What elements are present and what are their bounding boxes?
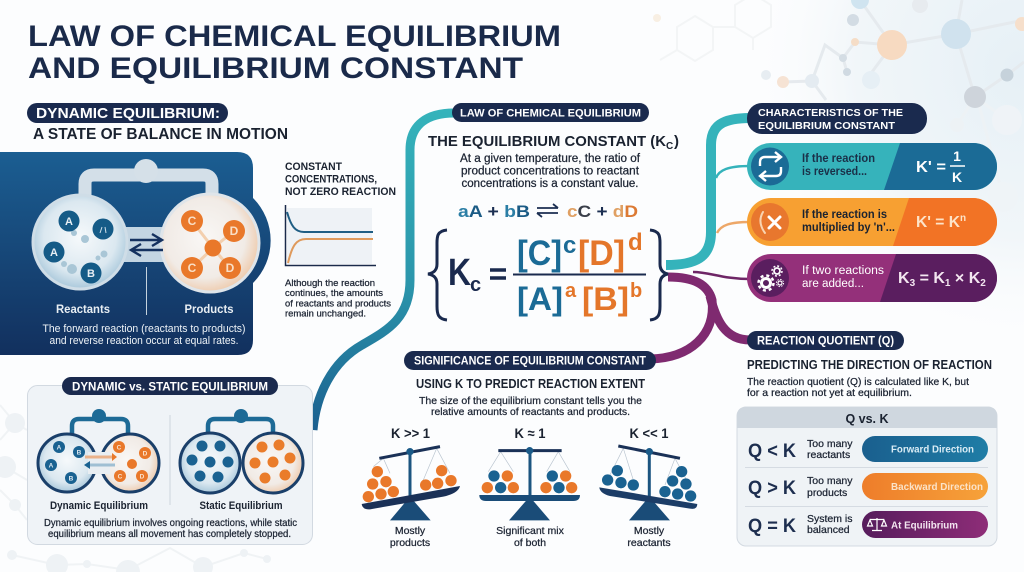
description: and reverse reaction occur at equal rates. — [50, 335, 238, 347]
dynamic equilibrium diagram: B — [69, 476, 74, 482]
row: reversed — [747, 143, 1000, 190]
panel: constant concentrations — [285, 161, 396, 320]
scale column: K >> 1: Mostly — [395, 525, 426, 537]
product flask: D — [230, 224, 239, 238]
icon: balanced scale — [479, 447, 580, 520]
reaction equation: aA + bB — [458, 202, 530, 221]
divider — [169, 415, 171, 505]
icon: scale tilted toward products — [362, 447, 460, 520]
row: multiplied: multiplied by 'n'... — [802, 222, 895, 234]
heading pill: SIGNIFICANCE OF EQUILIBRIUM CONSTANT — [414, 356, 646, 368]
description — [419, 395, 642, 418]
row: added: × K — [950, 270, 981, 287]
heading: CONCENTRATIONS, — [285, 174, 377, 186]
row: Q equals K — [748, 511, 988, 538]
diagram labels: Dynamic Equilibrium — [50, 500, 148, 512]
scale column: K << 1 — [599, 425, 697, 549]
equilibrium constant formula — [428, 229, 668, 320]
row: Q greater than K: Too many — [807, 475, 853, 487]
equilibrium constant formula: c — [470, 274, 481, 296]
subheading: PREDICTING THE DIRECTION OF REACTION — [747, 358, 992, 372]
heading pill — [452, 103, 649, 122]
row: reversed: If the reaction — [802, 153, 875, 165]
heading pill: DYNAMIC vs. STATIC EQUILIBRIUM — [72, 382, 268, 394]
row: multiplied: K' = K — [916, 214, 961, 231]
product flask: C — [188, 214, 197, 228]
row: Q greater than K: Q > K — [748, 478, 796, 499]
heading pill: CHARACTERISTICS OF THE — [758, 107, 903, 119]
equilibrium constant formula: [B] — [582, 281, 629, 317]
row: reversed: 1 — [953, 148, 961, 164]
row: Q less than K: Too many — [807, 438, 853, 450]
dynamic equilibrium diagram: C — [118, 474, 123, 480]
table: Q vs K: Q vs. K — [845, 412, 889, 426]
title: LAW OF CHEMICAL EQUILIBRIUM — [28, 20, 561, 53]
labels — [56, 302, 234, 316]
labels: Products — [184, 302, 234, 316]
icon: multiply — [760, 212, 780, 233]
section: dynamic equilibrium heading — [27, 103, 288, 143]
row: added: 3 — [910, 278, 916, 289]
row: Q less than K — [748, 436, 988, 462]
scale column: K >> 1: K >> 1 — [391, 425, 430, 441]
title — [28, 20, 561, 85]
scale column: K >> 1: products — [390, 537, 430, 549]
dynamic equilibrium diagram: D — [140, 474, 145, 480]
dynamic equilibrium diagram: A — [49, 462, 54, 470]
description: The size of the equilibrium constant tells you the — [419, 395, 642, 407]
heading: NOT ZERO REACTION — [285, 186, 396, 198]
heading pill: EQUILIBRIUM CONSTANT — [758, 120, 896, 132]
connector: teal flow to characteristics — [666, 118, 750, 265]
concentration chart — [286, 205, 376, 266]
caption — [285, 278, 391, 320]
definition text: concentrations is a constant value. — [462, 178, 638, 190]
background tint — [700, 0, 1024, 360]
equilibrium constant formula: [C] — [517, 234, 562, 273]
caption: continues, the amounts — [285, 288, 383, 299]
branch lines to characteristic rows — [693, 166, 750, 279]
comparison text: equilibrium means all movement has completely stopped. — [48, 528, 291, 540]
product flask — [161, 194, 259, 292]
scale column: K << 1: K << 1 — [630, 425, 669, 441]
description — [747, 376, 969, 399]
scale column: K ≈ 1: K ≈ 1 — [514, 425, 546, 441]
row: reversed: K — [952, 169, 962, 185]
row: Q equals K: At Equilibrium — [891, 520, 958, 532]
row: added: K — [898, 270, 910, 287]
decorative faint hexagons — [653, 0, 771, 61]
definition text: product concentrations to reactant — [461, 166, 640, 178]
subheading: A STATE OF BALANCE IN MOTION — [33, 126, 288, 143]
subheading: ) — [674, 133, 679, 150]
heading pill — [404, 351, 656, 370]
scale column: K << 1: reactants — [627, 537, 671, 549]
heading: CONSTANT — [285, 161, 342, 173]
equilibrium constant formula: [A] — [517, 281, 563, 317]
table: Q vs K — [737, 407, 997, 546]
reactant flask: B — [87, 268, 95, 280]
diagram labels: Static Equilibrium — [200, 500, 283, 512]
row: added: = K — [915, 270, 945, 287]
row: added: are added... — [802, 278, 864, 290]
row: Q greater than K: Backward Direction — [891, 481, 983, 493]
static equilibrium diagram — [180, 409, 303, 493]
section: reaction quotient — [737, 331, 997, 546]
reaction equation — [458, 202, 638, 221]
row: Q greater than K — [748, 473, 988, 500]
heading pill: REACTION QUOTIENT (Q) — [757, 336, 894, 348]
panel: reaction vessel — [0, 152, 271, 355]
reactant flask: A — [65, 216, 73, 228]
description — [42, 323, 246, 347]
equilibrium constant formula: [D] — [578, 234, 625, 273]
equilibrium constant formula: d — [628, 229, 643, 256]
connector: teal flow to law section — [313, 113, 454, 430]
subheading: C — [666, 141, 673, 152]
icon: balance scale — [868, 518, 886, 530]
decorative molecule network: bottom left — [0, 405, 271, 572]
reaction equation: cC + dD — [567, 202, 638, 221]
description: The forward reaction (reactants to products) — [42, 323, 246, 335]
dynamic equilibrium diagram: C — [117, 444, 122, 452]
heading pill — [747, 331, 904, 350]
product flask: C — [188, 261, 197, 275]
dynamic equilibrium diagram: D — [143, 450, 148, 458]
equilibrium constant formula: a — [565, 280, 577, 302]
section: law of chemical equilibrium — [428, 103, 679, 320]
reactant flask — [33, 195, 127, 289]
scale column: K ≈ 1: of both — [514, 537, 546, 549]
row: multiplied: If the reaction is — [802, 209, 887, 221]
heading — [285, 161, 396, 198]
labels: Reactants — [56, 302, 110, 316]
row: added: If two reactions — [802, 265, 884, 277]
row: multiplied: n — [960, 213, 966, 224]
subheading: USING K TO PREDICT REACTION EXTENT — [416, 377, 645, 391]
scale column: K << 1: Mostly — [634, 525, 665, 537]
comparison text: Dynamic equilibrium involves ongoing reactions, while static — [44, 517, 297, 529]
connector: purple flow to significance — [650, 277, 712, 359]
subheading: THE EQUILIBRIUM CONSTANT (K — [428, 133, 666, 150]
description: relative amounts of reactants and products. — [431, 406, 630, 418]
row: multiplied — [747, 198, 1000, 246]
top tube — [85, 159, 212, 198]
product flask: D — [226, 261, 235, 275]
scale column: K ≈ 1 — [479, 425, 580, 549]
panel: dynamic vs static equilibrium — [28, 377, 312, 544]
divider — [146, 267, 148, 315]
heading pill: DYNAMIC EQUILIBRIUM: — [36, 105, 220, 122]
icon: reverse arrows — [760, 152, 781, 181]
scale column: K >> 1 — [362, 425, 460, 549]
arrows: forward and reverse — [130, 234, 163, 256]
heading pill: LAW OF CHEMICAL EQUILIBRIUM — [460, 108, 641, 120]
heading pill — [747, 103, 927, 134]
dynamic equilibrium diagram: B — [77, 450, 82, 456]
comparison text — [44, 517, 297, 540]
panel background — [0, 152, 271, 355]
row: added: 1 — [945, 278, 951, 289]
equilibrium constant formula: c — [563, 232, 576, 259]
caption: Although the reaction — [285, 278, 375, 289]
row: reversed: K' = — [916, 159, 946, 176]
row: Q equals K: System is — [807, 513, 853, 525]
dynamic equilibrium diagram: A — [57, 444, 62, 452]
definition text — [460, 153, 641, 190]
scale column: K ≈ 1: Significant mix — [496, 525, 565, 537]
row: Q greater than K: products — [807, 487, 847, 499]
decorative molecule network: top right — [761, 0, 1024, 212]
panel background — [28, 386, 312, 544]
description: for a reaction not yet at equilibrium. — [747, 387, 912, 399]
dynamic equilibrium diagram — [38, 409, 159, 492]
definition text: At a given temperature, the ratio of — [460, 153, 641, 165]
row: added: 2 — [980, 278, 986, 289]
icon: scale tilted toward reactants — [599, 446, 697, 520]
connector: purple flow to reaction quotient — [710, 296, 750, 340]
row: reversed: is reversed... — [802, 166, 867, 178]
diagram labels — [50, 500, 283, 512]
description: The reaction quotient (Q) is calculated like K, but — [747, 376, 969, 388]
row: Q equals K: balanced — [807, 524, 850, 536]
row: Q equals K: Q = K — [748, 516, 796, 537]
equilibrium constant formula: K — [448, 252, 471, 294]
row: added — [747, 254, 1000, 302]
title: AND EQUILIBRIUM CONSTANT — [28, 52, 523, 85]
caption: remain unchanged. — [285, 308, 366, 320]
caption: of reactants and products — [285, 298, 391, 310]
row: Q less than K: Forward Direction — [891, 444, 974, 456]
section: significance of equilibrium constant — [362, 351, 697, 549]
heading pill — [62, 377, 278, 395]
row: Q less than K: reactants — [807, 449, 850, 461]
icon: gears — [758, 266, 784, 290]
equilibrium constant formula: b — [630, 280, 642, 302]
section: characteristics of the equilibrium constant — [747, 103, 1000, 302]
row: Q less than K: Q < K — [748, 441, 796, 462]
connector neck — [118, 227, 174, 262]
reactant flask: A — [50, 247, 58, 259]
